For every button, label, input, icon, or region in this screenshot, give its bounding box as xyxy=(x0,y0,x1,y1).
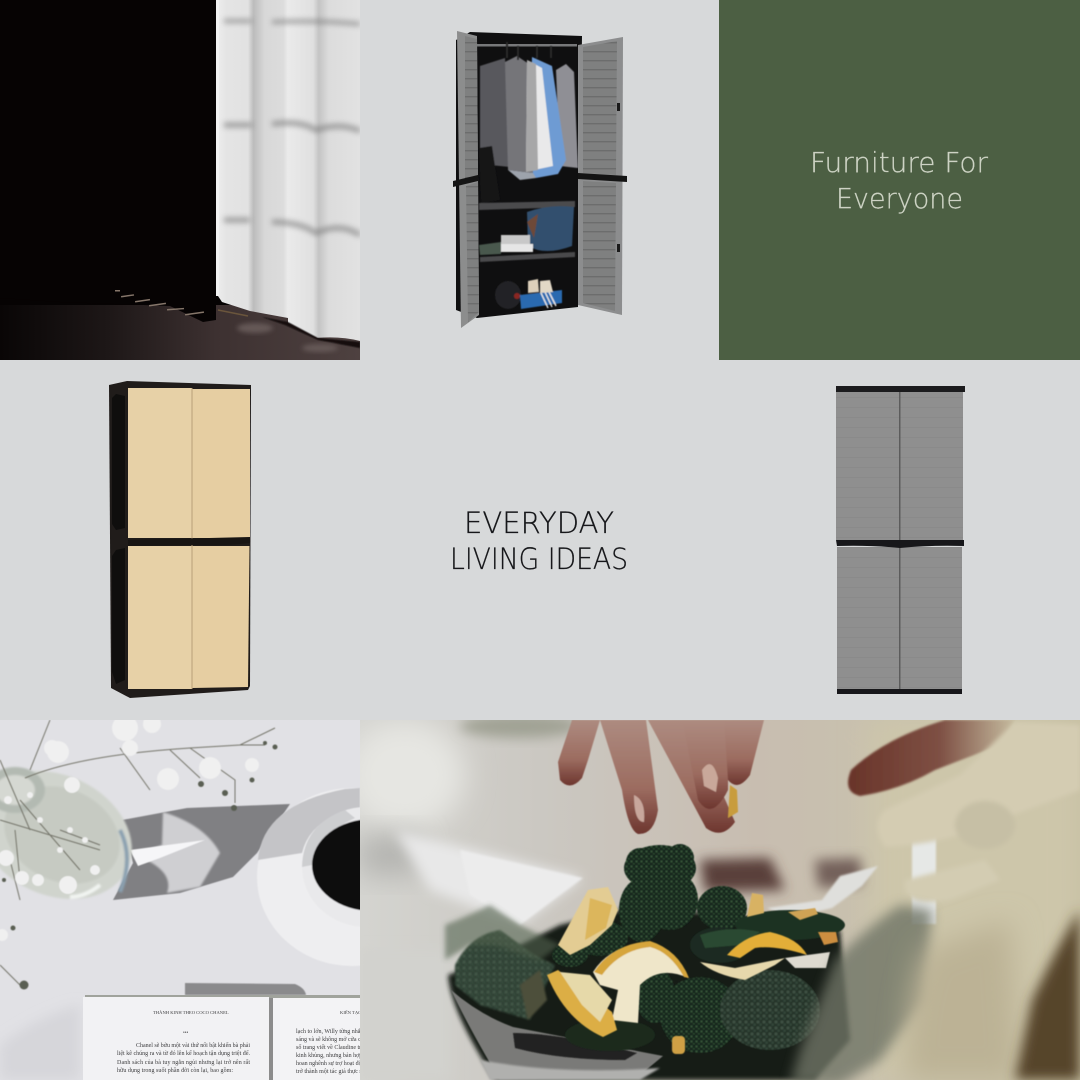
open book xyxy=(83,995,376,1080)
book page text: KIẾN TẠO xyxy=(340,1010,362,1015)
blurred foreground hand and food xyxy=(790,905,932,1080)
shelves xyxy=(479,201,575,210)
book page text: hoan nghênh sự trợ hoạt động xyxy=(296,1061,368,1067)
glass vase xyxy=(0,766,133,899)
book page text: số trang viết về Claudine trong xyxy=(296,1044,370,1051)
heading: furniture for everyone: Furniture For xyxy=(810,146,988,179)
coffee saucer xyxy=(257,788,360,966)
broccoli florets xyxy=(552,844,845,1053)
wardrobe body xyxy=(456,32,582,318)
backpack xyxy=(527,206,574,251)
book page text xyxy=(117,1010,376,1075)
sneakers and shoebox xyxy=(520,290,562,309)
book page text: sáng và sẽ không mở cửa cho xyxy=(296,1037,367,1043)
heading: everyday living ideas: EVERYDAY xyxy=(464,506,614,540)
book page text: lạch to lớn, Willy từng nhắc xyxy=(296,1028,363,1035)
book page text: liệt kê chúng ra và từ đó lên kế hoạch tận dụng triệt để. xyxy=(117,1050,250,1057)
book page text: Chanel sẽ bửu một vài thứ nổi bật khiến bà phải xyxy=(136,1042,250,1049)
photo: table with vase, coffee and open book xyxy=(0,720,360,1080)
vase shadow xyxy=(113,804,290,900)
book page text: ••• xyxy=(183,1031,189,1036)
dumbbell weights xyxy=(495,281,521,309)
photo: dark curtain and sheer window curtain xyxy=(0,0,360,360)
book page text: THÀNH KINH THEO COCO CHANEL xyxy=(153,1010,229,1015)
heading: furniture for everyone: Everyone xyxy=(836,182,963,215)
right hand xyxy=(848,720,1080,902)
right door xyxy=(578,37,623,315)
lemon slices xyxy=(547,887,838,1054)
books xyxy=(501,235,530,244)
white utensil xyxy=(911,838,937,925)
left door xyxy=(457,31,479,328)
heading: everyday living ideas: LIVING IDEAS xyxy=(450,542,628,576)
product: beige closed cabinet xyxy=(109,381,251,698)
bag on hook xyxy=(479,146,500,203)
book page text: Danh sách của bà tuy ngắn ngủi nhưng lại trở nên rất xyxy=(117,1059,250,1066)
pan xyxy=(448,905,850,1080)
hanging shirts xyxy=(480,56,578,180)
book page text: trở thành một tác giả thực sự xyxy=(296,1069,366,1075)
photo: hands seasoning a broccoli and lemon pan xyxy=(345,714,1080,1080)
coffee xyxy=(311,819,360,911)
book page text: hữu dụng trong suốt phần đời còn lại, bao gồm: xyxy=(117,1067,233,1074)
left leafy greens xyxy=(445,905,560,1020)
product: grey closed cabinet xyxy=(836,386,965,694)
flower sprigs xyxy=(0,715,278,990)
left hand fingers xyxy=(558,720,764,834)
book page text: kinh khủng, nhưng bản hợp đồng xyxy=(296,1052,376,1059)
product: open wardrobe with shirts xyxy=(453,31,627,328)
knife blade xyxy=(395,830,583,925)
panel: green title block xyxy=(719,0,1080,360)
book shadow xyxy=(185,983,306,995)
hanger hooks xyxy=(507,42,551,60)
